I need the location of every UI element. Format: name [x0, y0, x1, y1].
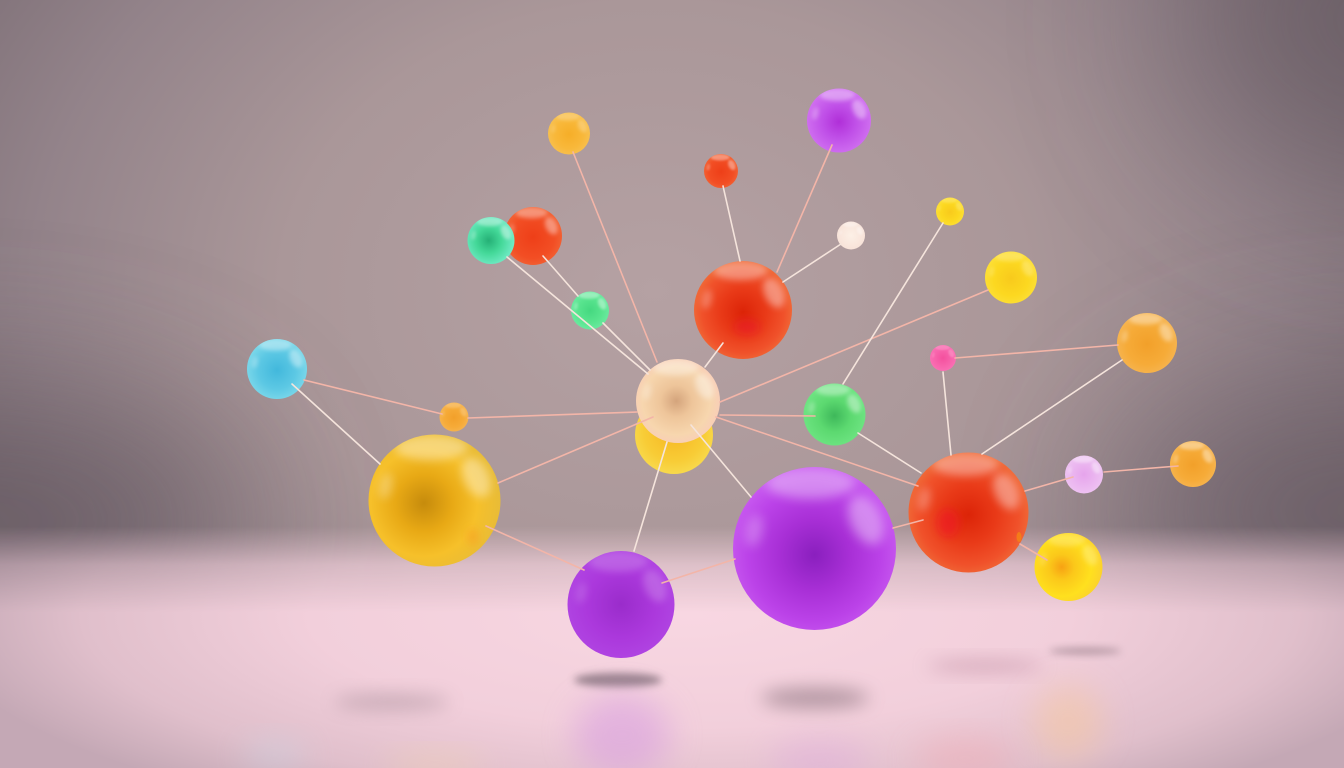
connector lines: [292, 145, 1178, 583]
node: small yellow top right: [936, 198, 964, 226]
node: small orange left: [440, 402, 468, 432]
node: yellow behind hub: [635, 396, 713, 474]
sphere colour spots: [467, 319, 1022, 546]
node: pale lilac: [1065, 456, 1103, 494]
node: orange right: [1117, 313, 1177, 373]
floor: [0, 530, 1344, 768]
node: red top centre: [694, 261, 792, 359]
node: green right of hub: [804, 384, 866, 446]
node: bright yellow lower right: [1034, 533, 1102, 601]
node: orange far right: [1170, 441, 1216, 487]
node: small green: [571, 292, 609, 330]
node: small red top: [704, 154, 738, 188]
node: medium purple: [568, 551, 674, 658]
node: yellow right: [985, 252, 1037, 304]
floor shadows and reflections: [243, 648, 1121, 768]
node: red top left: [504, 207, 562, 265]
node: purple top: [807, 88, 871, 152]
node: blue left: [247, 339, 307, 399]
node: central cream hub: [636, 359, 720, 443]
node: small pink: [930, 345, 956, 371]
node: large red right: [908, 452, 1028, 572]
node: large yellow: [368, 434, 500, 566]
node: white small: [837, 222, 865, 250]
node: teal top left: [468, 217, 514, 264]
node: orange top: [548, 112, 590, 154]
node: large purple: [733, 467, 896, 630]
